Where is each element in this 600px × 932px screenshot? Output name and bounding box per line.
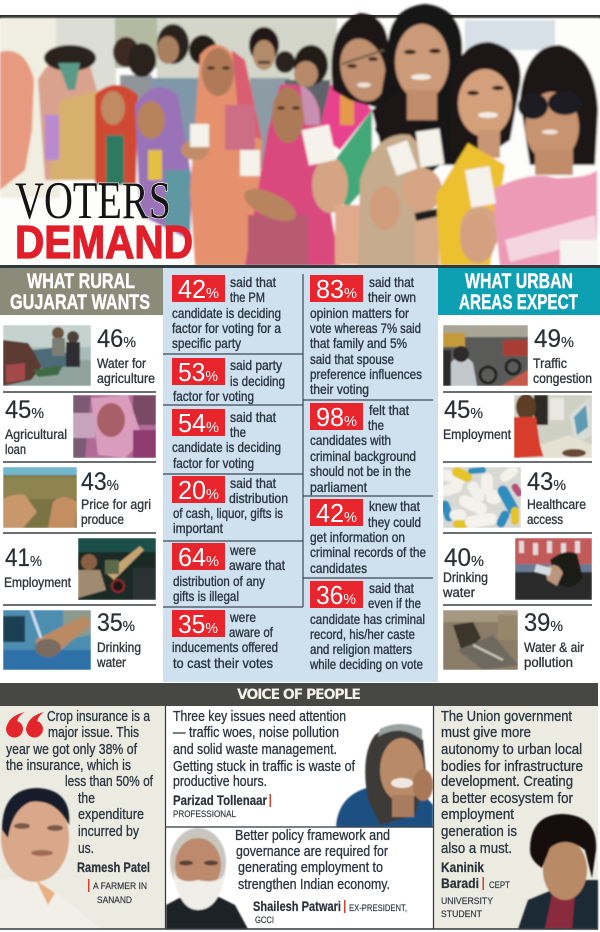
stat: 54% candidate: said that: [230, 409, 276, 425]
stat: 83% own opinion: said that spouse: [310, 351, 394, 367]
stat: 98% criminal background: criminal background: [310, 448, 416, 464]
stat: 42% PM candidate: the PM: [230, 289, 265, 305]
quote text: major issue. This: [48, 725, 139, 741]
stat: 98% criminal background: [310, 402, 416, 495]
stat: 83% own opinion: said that: [369, 274, 414, 290]
stat: 36% caste and religion: and religion matters: [310, 641, 412, 657]
attribution: Kaninik Baradi: UNIVERSITY: [441, 896, 494, 907]
stat: 64% gifts illegal: 64%: [178, 542, 219, 572]
quote text: the: [78, 791, 95, 807]
woman 4: [135, 87, 192, 240]
far left woman: [0, 51, 34, 190]
stat: 54% candidate: [172, 408, 281, 471]
quote text: generation is: [441, 824, 517, 840]
attribution: Ramesh Patel: Ramesh Patel: [77, 859, 150, 875]
item: water and air pollution 39%: Water & air: [524, 640, 584, 655]
stat: 36% caste and religion: said that: [369, 580, 414, 596]
stat: 42% criminal records info: knew that: [369, 498, 420, 514]
quote text: less than 50% of: [65, 774, 154, 790]
portrait: Kaninik Baradi: [518, 814, 598, 929]
stat: 83% own opinion: their own: [368, 289, 416, 305]
item: water for agriculture 46%: agriculture: [97, 371, 155, 386]
woman 3: [95, 85, 138, 185]
quote text: and solid waste management.: [173, 742, 337, 758]
attribution: Kaninik Baradi: [441, 859, 510, 920]
voter cards: [190, 124, 496, 208]
stat: 98% criminal background: felt that: [369, 402, 409, 418]
quote text: productive hours.: [173, 774, 267, 790]
stat: 53% party: said party: [230, 357, 282, 373]
quote text: Getting stuck in traffic is waste of: [173, 759, 356, 775]
item: price for agri produce 43%: [3, 467, 151, 528]
portrait: Ramesh Patel: [0, 788, 100, 929]
item: agricultural loan 45%: [5, 395, 156, 458]
heading: rural: GUJARAT WANTS: [10, 291, 150, 314]
item: drinking water 35%: 35%: [97, 609, 135, 637]
stat: 53% party: is deciding: [230, 373, 285, 389]
item: drinking water 35%: Drinking: [97, 640, 141, 655]
back row men: [150, 78, 200, 158]
woman 8: [375, 4, 470, 190]
stat: 20% cash and gifts: of cash, liquor, gifts is: [173, 505, 283, 521]
attribution: Parizad Tollenaar: PROFESSIONAL: [173, 809, 236, 820]
quote text: — traffic woes, noise pollution: [173, 725, 339, 741]
stat: 35% inducements: to cast their votes: [173, 655, 273, 671]
column: own opinion and criminal records: [303, 274, 433, 672]
stat: 83% own opinion: opinion matters for: [310, 305, 409, 321]
quote text: [6, 709, 154, 857]
woman 7: [332, 13, 388, 110]
quote text: incurred by: [78, 824, 140, 840]
item: drinking water 35%: water: [96, 655, 126, 670]
stat: 35% inducements: [172, 609, 278, 671]
item: traffic congestion 49%: 49%: [534, 325, 574, 353]
attribution: Ramesh Patel: SANAND: [97, 895, 132, 906]
quote text: The Union government: [441, 709, 572, 725]
stat: 42% criminal records info: get information on: [310, 529, 405, 545]
item: agricultural loan 45%: loan: [5, 442, 26, 457]
title word: Demand: DEMAND: [15, 216, 193, 268]
stat: 42% PM candidate: [172, 274, 281, 351]
quote text: bodies for infrastructure: [441, 759, 583, 775]
stat: 42% criminal records info: criminal records of the: [310, 544, 426, 560]
stat: 98% criminal background: should not be in the: [310, 463, 411, 479]
quote text: governance are required for: [236, 844, 388, 860]
stat: 42% PM candidate: specific party: [172, 335, 241, 351]
quote text: [441, 709, 583, 857]
quote text: the insurance, which is: [6, 758, 131, 774]
stat: 42% PM candidate: candidate is deciding: [172, 305, 281, 321]
stat: 98% criminal background: the: [368, 417, 384, 433]
panel: quote Ramesh Patel: [0, 706, 165, 929]
quote text: must give more: [441, 725, 531, 741]
item: water and air pollution 39%: pollution: [524, 655, 573, 670]
stat: 54% candidate: candidate is deciding: [172, 439, 281, 455]
panel: what rural Gujarat wants: [0, 268, 163, 670]
woman 9: [450, 42, 521, 160]
voice of people banner: VOICE OF PEOPLE: [237, 687, 361, 703]
pink saree behind woman 7: [318, 85, 372, 150]
item: traffic congestion 49%: [443, 325, 592, 386]
stat: 83% own opinion: that family and 5%: [310, 335, 407, 351]
portrait: Parizad Tollenaar: [336, 724, 433, 827]
attribution: Kaninik Baradi: Baradi: [441, 875, 479, 891]
stat: 53% party: [172, 357, 285, 404]
stat: 42% PM candidate: said that: [230, 274, 276, 290]
stat: 36% caste and religion: [309, 580, 425, 672]
quote text: expenditure: [78, 807, 144, 823]
stat: 36% caste and religion: candidate has criminal: [310, 611, 425, 627]
hero photo: voters in a queue holding ID cards: [0, 4, 600, 268]
item: water and air pollution 39%: 39%: [524, 609, 563, 637]
icon: red quotation marks: [6, 712, 44, 738]
quote text: also a must.: [441, 841, 512, 857]
panel: survey findings: [163, 268, 438, 682]
stat: 83% own opinion: [310, 274, 422, 397]
stat: 53% party: 53%: [178, 357, 218, 387]
attribution: Ramesh Patel: [77, 859, 150, 906]
quote text: generating employment to: [238, 860, 383, 876]
item: drinking water 40%: [442, 538, 592, 600]
quote text: Crop insurance is a: [47, 709, 151, 725]
panel: quote Kaninik Baradi: [434, 706, 598, 929]
panel: quote Parizad Tollenaar: [166, 706, 433, 827]
attribution: Shailesh Patwari: EX-PRESIDENT,: [349, 903, 407, 914]
item: water for agriculture 46%: [3, 325, 155, 386]
item: employment 45%: Employment: [443, 427, 511, 442]
quote text: year we got only 38% of: [6, 742, 138, 758]
stat: 42% PM candidate: factor for voting for a: [172, 320, 281, 336]
stat: 35% inducements: inducements offered: [172, 639, 278, 655]
stat: 64% gifts illegal: distribution of any: [173, 573, 265, 589]
item: employment 41%: [4, 538, 156, 600]
woman 5 salmon saree: [190, 45, 262, 266]
stat: 42% criminal records info: they could: [368, 514, 421, 530]
attribution: Ramesh Patel: A FARMER IN: [93, 881, 147, 892]
item: price for agri produce 43%: 43%: [81, 468, 119, 496]
quote text: Better policy framework and: [235, 828, 390, 844]
quote text: [173, 709, 356, 790]
quote text: employment: [441, 807, 514, 823]
item: employment 45%: 45%: [444, 396, 483, 424]
woman 6 pink saree: [245, 84, 340, 266]
stat: 36% caste and religion: 36%: [316, 580, 356, 610]
item: healthcare access 43%: access: [527, 512, 563, 527]
item: price for agri produce 43%: Price for agri: [81, 497, 151, 512]
attribution: Kaninik Baradi: STUDENT: [441, 909, 482, 920]
quote text: autonomy to urban local: [441, 742, 582, 758]
quote text: a better ecosystem for: [441, 791, 573, 807]
stat: 42% criminal records info: 42%: [316, 498, 357, 528]
stat: 42% criminal records info: [310, 498, 426, 576]
stat: 35% inducements: aware of: [229, 624, 273, 640]
item: drinking water 35%: [3, 609, 141, 670]
heading: rural: WHAT RURAL: [27, 270, 135, 293]
heading: urban: [438, 268, 600, 315]
stat: 98% criminal background: parliament: [310, 479, 367, 495]
portrait: Shailesh Patwari: [166, 828, 248, 929]
attribution: Shailesh Patwari: GCCI: [255, 915, 274, 926]
item: agricultural loan 45%: Agricultural: [5, 427, 67, 442]
item: healthcare access 43%: Healthcare: [527, 497, 586, 512]
stat: 64% gifts illegal: [172, 542, 285, 604]
stat: 83% own opinion: vote whereas 7% said: [310, 320, 421, 336]
stat: 42% criminal records info: candidates: [310, 560, 367, 576]
item: employment 45%: [443, 394, 592, 458]
attribution: Shailesh Patwari: Shailesh Patwari: [253, 898, 341, 914]
item: healthcare access 43%: 43%: [527, 468, 566, 496]
item: traffic congestion 49%: Traffic: [533, 356, 567, 371]
heading: rural: [0, 268, 163, 315]
stat: 35% inducements: were: [229, 609, 256, 625]
attribution: Kaninik Baradi: CEPT: [489, 880, 510, 891]
stat: 36% caste and religion: even if the: [368, 595, 421, 611]
stat: 64% gifts illegal: gifts is illegal: [173, 588, 239, 604]
stat: 64% gifts illegal: were: [229, 542, 256, 558]
attribution: Kaninik Baradi: Kaninik: [441, 859, 484, 875]
item: employment 41%: 41%: [5, 544, 42, 572]
item: drinking water 40%: Drinking: [443, 570, 488, 585]
item: employment 41%: Employment: [4, 575, 71, 590]
quote text: strengthen Indian economy.: [238, 877, 390, 893]
stat: 20% cash and gifts: important: [173, 520, 223, 536]
woman 10: [520, 45, 598, 165]
stat: 64% gifts illegal: aware that: [229, 557, 285, 573]
attribution: Shailesh Patwari: [253, 898, 407, 926]
stat: 20% cash and gifts: distribution: [229, 490, 288, 506]
stat: 54% candidate: factor for voting: [173, 455, 254, 471]
item: drinking water 40%: 40%: [444, 544, 484, 572]
item: drinking water 40%: water: [442, 585, 475, 600]
title word: Voters: VOTERS: [15, 172, 171, 230]
voice of people banner: [0, 683, 598, 706]
item: price for agri produce 43%: produce: [81, 512, 124, 527]
quote text: us.: [78, 841, 94, 857]
item: water for agriculture 46%: Water for: [97, 356, 146, 371]
stat: 36% caste and religion: record, his/her caste: [310, 626, 415, 642]
attribution: Parizad Tollenaar: Parizad Tollenaar: [173, 792, 267, 808]
stat: 83% own opinion: preference influences: [310, 366, 422, 382]
stat: 83% own opinion: their voting: [310, 381, 369, 397]
stat: 42% PM candidate: 42%: [178, 274, 219, 304]
stat: 98% criminal background: candidates with: [310, 432, 391, 448]
column: party and candidate factors: [163, 274, 303, 671]
stat: 54% candidate: 54%: [178, 408, 219, 438]
woman 2: [38, 58, 102, 180]
title: Voters Demand: [15, 172, 193, 268]
stat: 20% cash and gifts: [172, 475, 288, 536]
quote text: development. Creating: [441, 774, 573, 790]
panel: quote Shailesh Patwari: [166, 828, 433, 929]
item: traffic congestion 49%: congestion: [533, 371, 592, 386]
quote text: [235, 828, 390, 893]
attribution: Parizad Tollenaar: [173, 792, 271, 820]
stat: 54% candidate: the: [230, 424, 246, 440]
item: water and air pollution 39%: [443, 609, 584, 670]
stat: 53% party: factor for voting: [173, 388, 254, 404]
stat: 83% own opinion: 83%: [316, 274, 357, 304]
stat: 98% criminal background: 98%: [316, 402, 357, 432]
item: agricultural loan 45%: 45%: [5, 396, 44, 424]
item: water for agriculture 46%: 46%: [97, 325, 136, 353]
stat: 20% cash and gifts: 20%: [178, 475, 219, 505]
stat: 35% inducements: 35%: [178, 609, 218, 639]
item: healthcare access 43%: [443, 467, 586, 528]
panel: what urban areas expect: [438, 268, 600, 670]
stat: 20% cash and gifts: said that: [230, 475, 276, 491]
quote text: Three key issues need attention: [173, 709, 346, 725]
stat: 36% caste and religion: while deciding on vote: [309, 656, 423, 672]
